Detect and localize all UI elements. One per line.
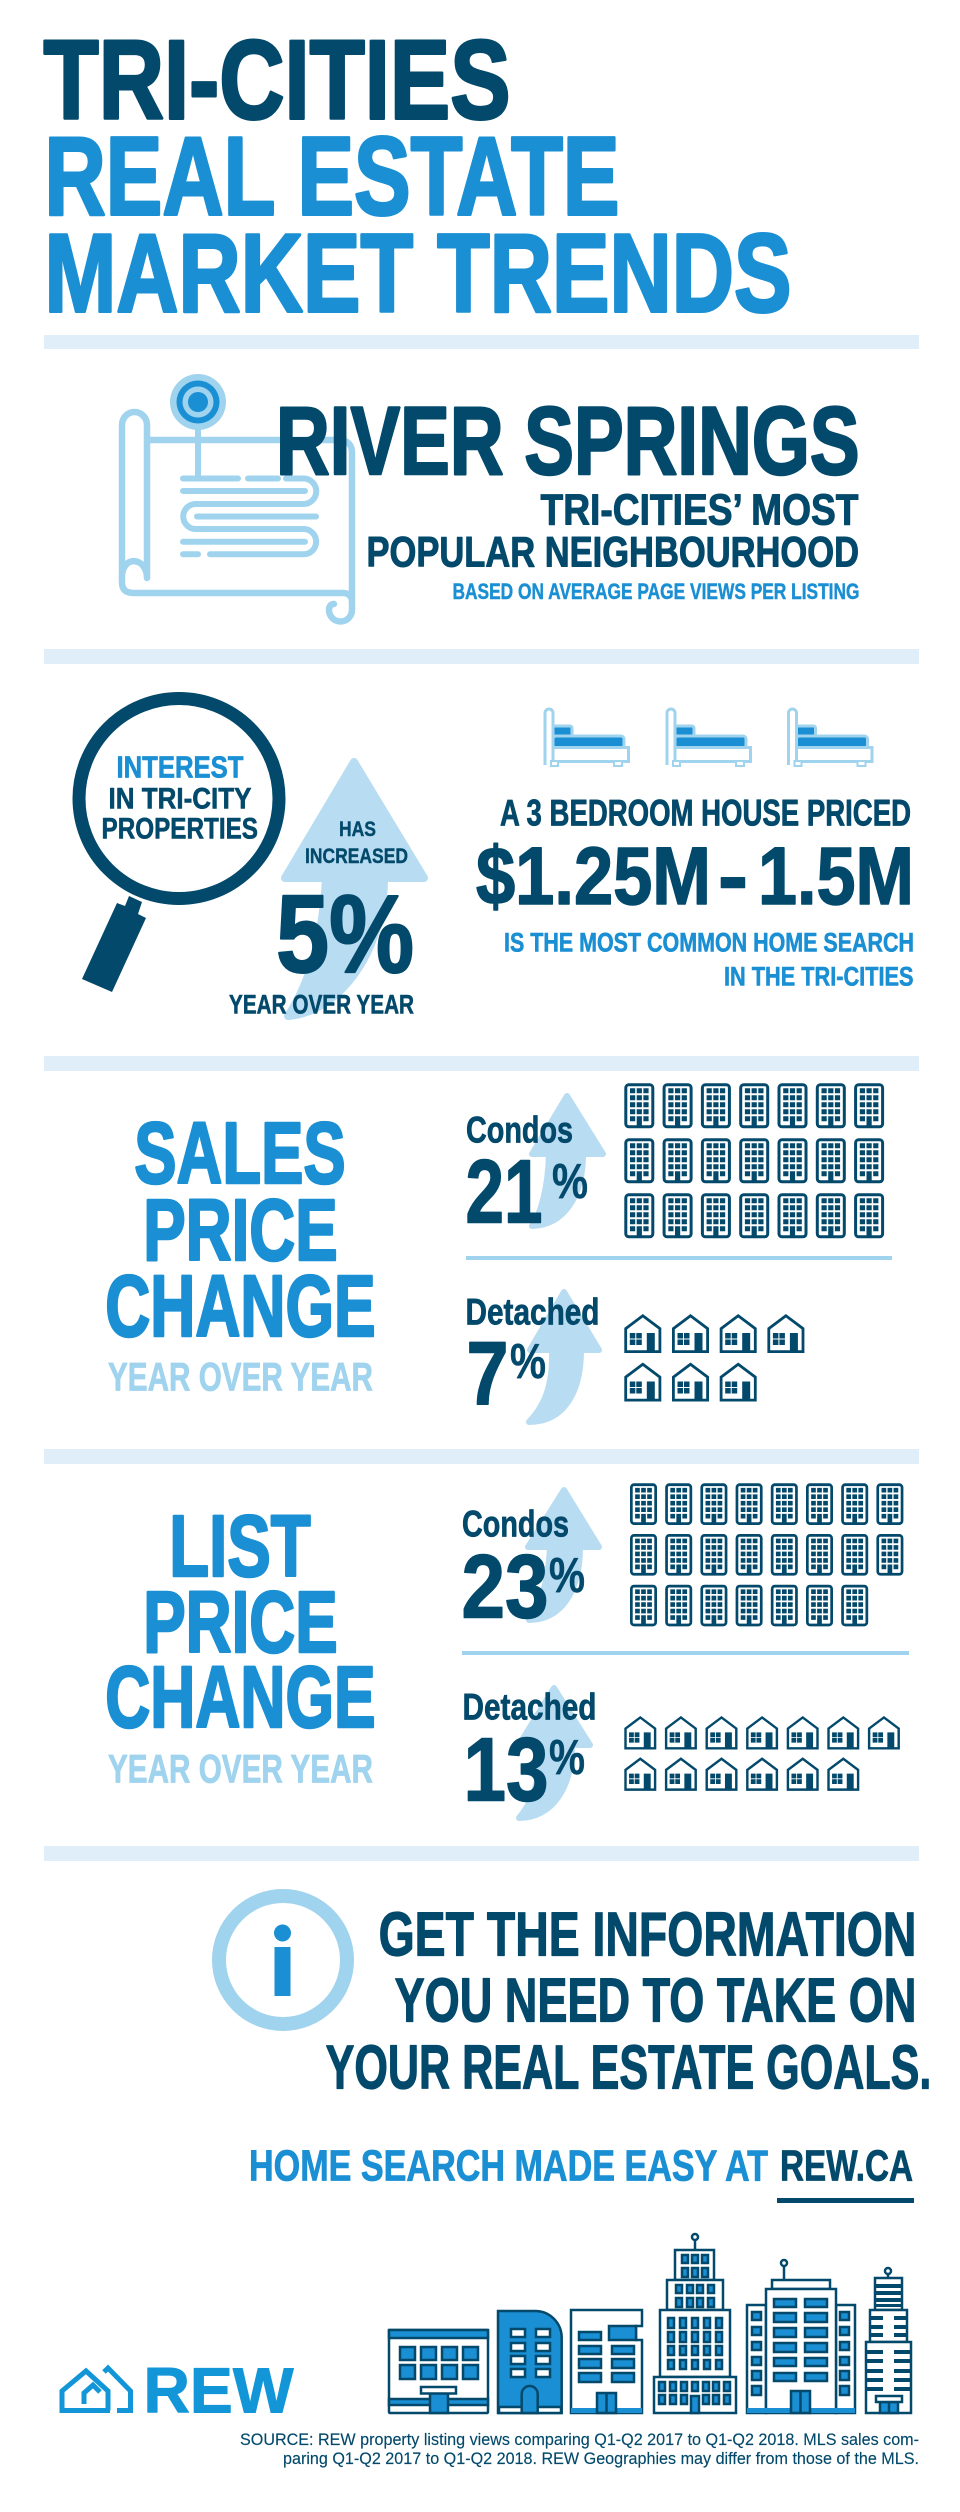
heading: list price change: LIST (169, 1498, 311, 1595)
stat: percent sign: % (549, 1549, 585, 1603)
website underline (777, 2198, 914, 2203)
heading: sales price change: SALES (134, 1105, 346, 1202)
stat: 21: 21 (466, 1142, 542, 1242)
icon: three beds (545, 709, 872, 766)
stat: 13: 13 (464, 1720, 548, 1820)
logo: REW (62, 2354, 294, 2426)
label: condos: Condos (466, 1110, 573, 1151)
arrow: detached list (519, 1688, 590, 1818)
tagline: HOME SEARCH MADE EASY AT (249, 2142, 768, 2191)
heading: sales price change: CHANGE (105, 1258, 376, 1355)
building: notched (571, 2310, 642, 2413)
icon: information circle (219, 1896, 347, 2024)
label: detached: Detached (466, 1292, 600, 1333)
icon grid: 7 houses (626, 1316, 803, 1400)
stat: 7: 7 (466, 1324, 508, 1424)
source line 2: paring Q1-Q2 2017 to Q1-Q2 2018. REW Geographies may differ from those of the MLS. (283, 2449, 919, 2468)
stat: percent sign: % (510, 1335, 546, 1389)
magnifier text line 1: INTEREST (116, 750, 244, 785)
heading: list price change: CHANGE (105, 1649, 376, 1746)
panel: interest increase (79, 698, 424, 1020)
icon grid: 13 houses (626, 1717, 899, 1790)
title line 2: REAL ESTATE (44, 114, 620, 238)
illustration: city skyline (389, 2234, 911, 2413)
arrow: detached sales (529, 1292, 599, 1422)
source note (240, 2430, 919, 2468)
subheading: year over year: YEAR OVER YEAR (108, 1356, 373, 1400)
icon: magnifying glass (79, 698, 279, 992)
label: increased: INCREASED (305, 844, 408, 868)
subheading: year over year: YEAR OVER YEAR (108, 1748, 373, 1792)
stat: price range: $1.25M (476, 831, 711, 922)
stat: percent sign: % (552, 1155, 588, 1209)
icon grid: 21 condo buildings (626, 1085, 883, 1237)
panel: most popular neighbourhood (122, 374, 859, 622)
stat: price range: - (718, 831, 748, 922)
label: year over year: YEAR OVER YEAR (229, 990, 414, 1020)
heading: list price change (105, 1498, 376, 1746)
panel: common home search (476, 709, 914, 992)
source line 1: SOURCE: REW property listing views comparing Q1-Q2 2017 to Q1-Q2 2018. MLS sales com- (240, 2430, 919, 2449)
label: condos: Condos (462, 1504, 569, 1545)
label: detached: Detached (462, 1687, 596, 1728)
website: REW.CA (780, 2142, 913, 2191)
building: low office (389, 2330, 488, 2413)
arrow: condos sales (532, 1096, 603, 1226)
icon: map with pin (122, 374, 352, 622)
stat: price range: 1.5M (758, 831, 914, 922)
building: winged block (747, 2260, 855, 2413)
stat: 23: 23 (462, 1537, 548, 1637)
arrow: large up arrow (285, 762, 424, 1016)
magnifier text line 3: PROPERTIES (102, 813, 258, 846)
stat: percent sign: % (549, 1731, 585, 1785)
building: tiered tower (654, 2234, 736, 2413)
panel: sales price change (105, 1085, 892, 1424)
stat: price range (476, 831, 914, 922)
heading: sales price change (105, 1105, 376, 1355)
building: striped tower (866, 2268, 911, 2413)
heading: list price change: PRICE (143, 1574, 338, 1671)
note line 2: IN THE TRI-CITIES (724, 962, 914, 992)
subheading line 1: TRI-CITIES’ MOST (540, 486, 859, 534)
heading: sales price change: PRICE (143, 1182, 338, 1279)
icon grid: 23 condo buildings (631, 1485, 902, 1625)
stat: 5 percent: 5% (276, 873, 414, 996)
title (44, 18, 792, 336)
title line 1: TRI-CITIES (44, 18, 510, 142)
panel: call to action (219, 1896, 931, 2203)
magnifier text line 2: IN TRI-CITY (108, 783, 252, 816)
logo: REW: REW (144, 2354, 294, 2426)
building: blue rounded (498, 2311, 562, 2413)
panel: list price change (105, 1485, 909, 1820)
arrow: condos list (528, 1490, 599, 1620)
label: has: HAS (339, 817, 376, 841)
